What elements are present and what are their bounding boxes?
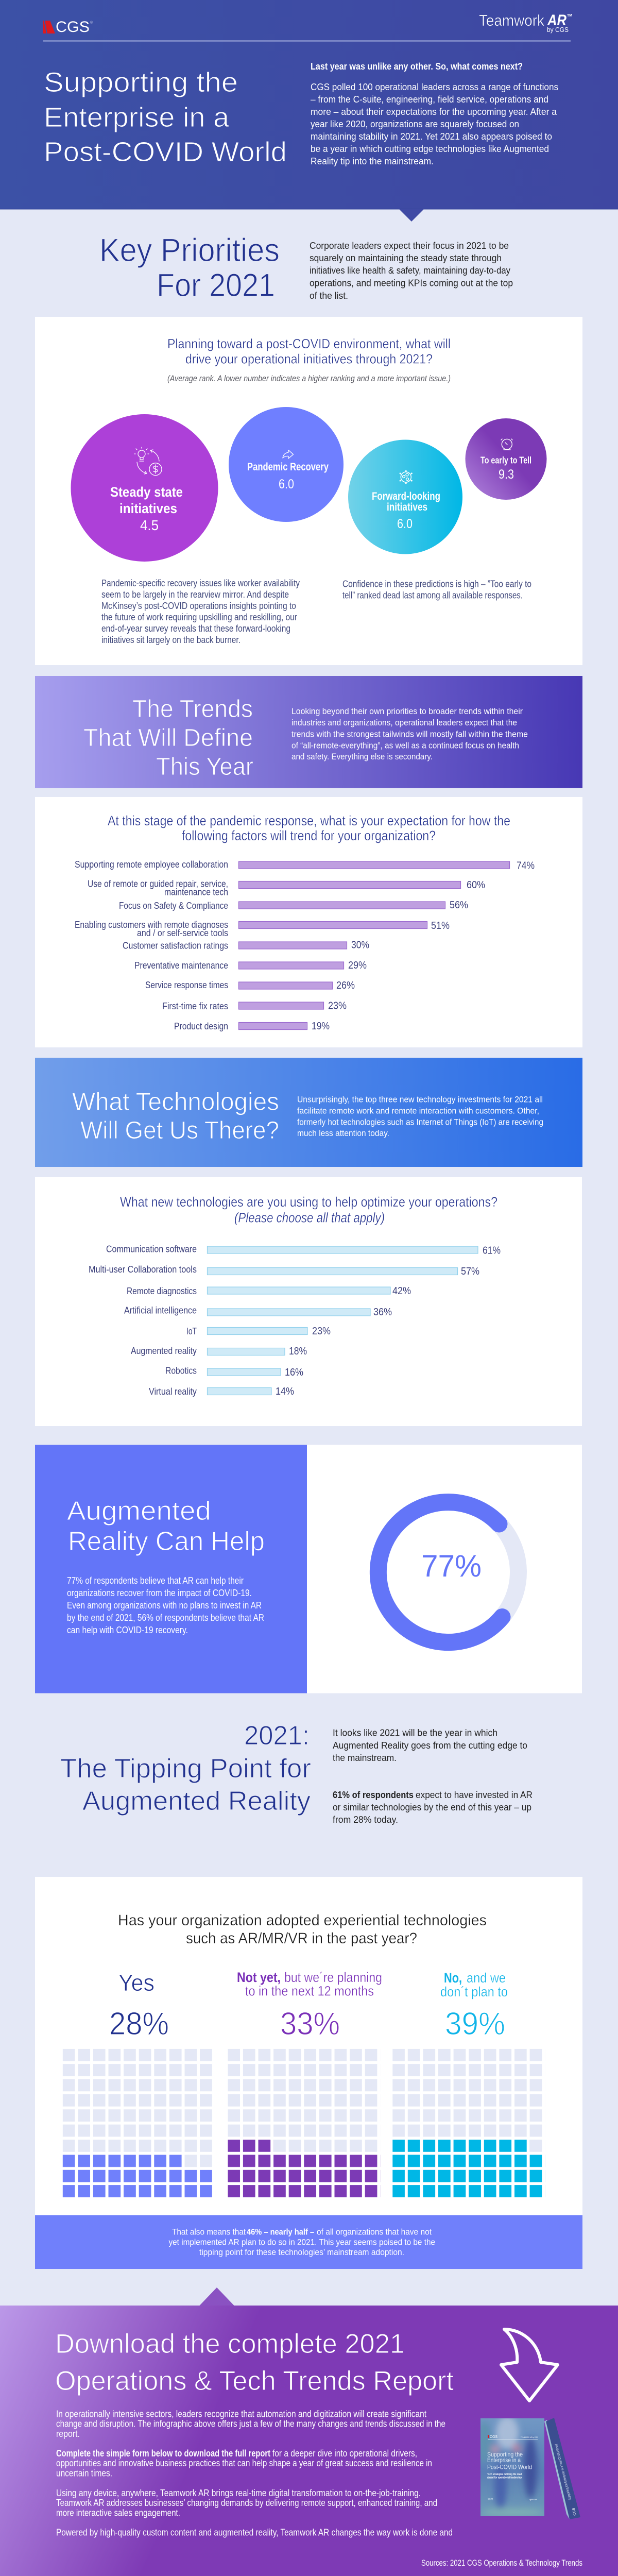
text block: uncertain times. [56, 2468, 112, 2478]
bubble: pandemic recovery [229, 407, 344, 522]
text block: for a deeper dive into operational drivers, [272, 2448, 417, 2459]
key priorities intro: squarely on maintaining the steady state through [310, 253, 502, 263]
bar chart: 42% [392, 1285, 411, 1297]
intro text: Last year was unlike any other. So, what comes next? [311, 61, 523, 72]
intro text: year like 2020, organizations are squarely focused on [311, 119, 519, 129]
panel: priorities bubbles [35, 317, 582, 665]
bar chart: 26% [336, 980, 355, 991]
bar chart: First-time fix rates [162, 1001, 228, 1011]
bar chart: 14% [276, 1386, 294, 1397]
bubble: forward-looking: Forward-looking [372, 490, 440, 502]
report book mockup: 2021 [488, 2498, 493, 2501]
paragraph: pandemic-specific: McKinsey’s post-COVID operations insights pointing to [101, 601, 296, 611]
bar chart: Service response times [145, 980, 228, 990]
logo: Teamwork AR by CGS: by CGS [547, 26, 569, 33]
panel: augmented reality can help [35, 1445, 582, 1693]
question: such as AR/MR/VR in the past year? [186, 1930, 417, 1947]
text block: more interactive sales engagement. [56, 2508, 180, 2518]
column: not yet: but we´re planning [284, 1970, 382, 1985]
intro text: more – about their expectations for the upcoming year. After a [311, 107, 557, 117]
heading: This Year [156, 753, 253, 781]
text block: Complete the simple form below to download the full report [56, 2448, 270, 2459]
paragraph: confidence [342, 579, 531, 601]
intro text: be a year in which cutting edge technologies like Augmented [311, 144, 549, 154]
column: no: 39% [445, 2006, 505, 2042]
bar chart: Artificial intelligence [124, 1306, 197, 1316]
heading: Operations & Tech Trends Report [55, 2366, 454, 2396]
heading: tipping point: 2021: [244, 1721, 310, 1751]
text block: can help with COVID-19 recovery. [67, 1625, 188, 1635]
banner: the trends [35, 676, 582, 788]
bubble: pandemic recovery: 6.0 [279, 477, 294, 492]
question [118, 1912, 487, 1947]
bar chart: Customer satisfaction ratings [123, 941, 228, 951]
logo: Teamwork AR by CGS: AR [547, 12, 566, 29]
icon: curved down arrow [501, 2329, 558, 2401]
report book mockup: Supporting the Enterprise in a Post-COVID World [555, 2444, 572, 2500]
donut chart 77%: 77% [421, 1549, 482, 1583]
text block: formerly hot technologies such as Internet of Things (IoT) are receiving [297, 1117, 543, 1127]
text block [67, 1575, 264, 1635]
text block: Teamwork AR addresses businesses’ changing demands by delivering remote support, enhanced training, and [56, 2498, 437, 2508]
heading [55, 2329, 454, 2396]
bubble: too early to tell [466, 418, 547, 500]
report book mockup: ahead for operational leadership [487, 2476, 522, 2479]
bar chart: 30% [351, 940, 369, 951]
bar chart [75, 859, 535, 1032]
heading: tipping point [60, 1721, 311, 1816]
column: no: No, [444, 1970, 462, 1986]
panel: download footer [0, 2287, 618, 2576]
icon: virus [400, 470, 412, 484]
column: no [392, 1970, 545, 2200]
paragraph: pandemic-specific [101, 578, 300, 645]
heading: Download the complete 2021 [55, 2329, 405, 2359]
bubble: steady state: initiatives [119, 501, 177, 516]
report book mockup: Tech strategies defining the road [487, 2473, 522, 2476]
column: yes: Yes [118, 1970, 154, 1996]
tipping point text: Augmented Reality goes from the cutting edge to [333, 1740, 527, 1751]
paragraph: pandemic-specific: the future of work requiring upskilling and reskilling, our [101, 612, 297, 622]
bar chart: 61% [483, 1245, 501, 1256]
bar chart: Communication software [106, 1244, 197, 1254]
tipping point text: expect to have invested in AR [416, 1790, 533, 1800]
bar chart: 19% [312, 1021, 330, 1032]
waffle: 39 of 100 [392, 2049, 545, 2200]
paragraph: pandemic-specific: Pandemic-specific recovery issues like worker availability [101, 578, 300, 588]
paragraph: pandemic-specific: seem to be largely in the rearview mirror. And despite [101, 589, 289, 600]
report book mockup: TEAMWORK AR by CGS [521, 2436, 538, 2438]
text block: of “all-remote-everything”, as well as a continued focus on health [291, 741, 519, 750]
question: Planning toward a post-COVID environment, what will [167, 336, 451, 351]
column: no: don´t plan to [440, 1984, 508, 1999]
column: not yet: to in the next 12 months [245, 1984, 374, 1999]
text block: much less attention today. [297, 1128, 389, 1138]
tipping point text: 61% of respondents [333, 1790, 414, 1800]
question: What new technologies are you using to help optimize your operations? [120, 1194, 497, 1210]
bar chart: Enabling customers with remote diagnoses [75, 920, 228, 930]
intro text: CGS polled 100 operational leaders across a range of functions [311, 82, 558, 92]
waffle: 28 of 100 [63, 2049, 215, 2200]
text block: 77% of respondents believe that AR can help their [67, 1575, 244, 1586]
heading: What Technologies [72, 1088, 279, 1116]
text block [56, 2409, 453, 2538]
bar chart: Robotics [165, 1365, 197, 1376]
main title: Enterprise in a [44, 102, 230, 133]
bar chart: 18% [289, 1346, 307, 1357]
icon: arrow [283, 450, 294, 459]
text block [297, 1094, 543, 1138]
bubble: steady state [71, 414, 218, 562]
text block: and safety. Everything else is secondary. [291, 752, 433, 761]
bubble: too early to tell: 9.3 [499, 467, 514, 482]
report book mockup: Post-COVID World [487, 2464, 532, 2471]
tipping point text: It looks like 2021 will be the year in which [333, 1728, 497, 1738]
main title: Supporting the [44, 67, 238, 98]
paragraph: pandemic-specific: end-of-year survey reveals that these forward-looking [101, 623, 290, 634]
key priorities intro: of the list. [310, 291, 348, 301]
heading [72, 1088, 279, 1144]
bar chart: 56% [450, 900, 468, 911]
heading: tipping point: Augmented Reality [82, 1786, 311, 1816]
bar chart: Virtual reality [149, 1386, 197, 1397]
bar chart: maintenance tech [164, 887, 228, 897]
heading: tipping point: The Tipping Point for [60, 1754, 311, 1784]
bar chart: Multi-user Collaboration tools [89, 1264, 197, 1275]
text block: Unsurprisingly, the top three new technology investments for 2021 all [297, 1094, 543, 1105]
text block: In operationally intensive sectors, leaders recognize that automation and digitization will create significant [56, 2409, 426, 2419]
tipping point text: or similar technologies by the end of this year – up [333, 1802, 531, 1812]
paragraph: confidence: Confidence in these predictions is high – ”Too early to [342, 579, 531, 589]
text block [291, 706, 528, 761]
bar chart: 57% [461, 1266, 479, 1277]
icon: bulb and dollar cycle [134, 447, 162, 476]
callout: 46 percent: of all organizations that have not [317, 2227, 432, 2237]
text block: opportunities and innovative business practices that can help shape a year of great success and resilience in [56, 2458, 432, 2468]
logo: CGS [43, 19, 93, 36]
key priorities intro [310, 241, 513, 301]
bubble: too early to tell: To early to Tell [480, 455, 531, 466]
bubble: forward-looking: 6.0 [397, 517, 413, 531]
logo: Teamwork AR by CGS [479, 11, 572, 33]
question [108, 813, 510, 843]
report book mockup: Supporting the [487, 2451, 523, 2458]
question: following factors will trend for your organization? [182, 828, 436, 843]
icon: clock [501, 439, 512, 450]
heading: Key Priorities: Key Priorities [99, 232, 280, 268]
bar chart: 29% [348, 960, 367, 971]
main title: Post-COVID World [44, 137, 287, 167]
heading: Reality Can Help [68, 1527, 265, 1556]
tipping point text: the mainstream. [333, 1753, 397, 1763]
report book mockup: CGS [572, 2507, 577, 2516]
column: yes [63, 1970, 215, 2200]
text block: facilitate remote work and remote interaction with customers. Other, [297, 1106, 539, 1116]
bar chart: 51% [431, 920, 450, 931]
text block: Even among organizations with no plans to invest in AR [67, 1600, 262, 1611]
logo: Teamwork AR by CGS: Teamwork [479, 11, 544, 29]
text block: report. [56, 2429, 80, 2439]
text block: change and disruption. The infographic above offers just a few of the many changes and trends discussed in the [56, 2418, 445, 2429]
bubble: pandemic recovery: Pandemic Recovery [247, 461, 329, 473]
heading [83, 696, 253, 781]
key priorities intro: operations, and meeting KPIs coming out at the top [310, 278, 513, 289]
bar chart: 23% [328, 1001, 347, 1012]
bar chart: Product design [174, 1021, 228, 1031]
intro text [311, 61, 558, 166]
bar chart: Focus on Safety & Compliance [119, 901, 228, 911]
question [167, 336, 451, 367]
heading [67, 1496, 265, 1556]
question: drive your operational initiatives through 2021? [185, 351, 433, 367]
bar chart: 23% [312, 1326, 331, 1337]
key priorities intro: Corporate leaders expect their focus in 2021 to be [310, 241, 509, 251]
bar chart: 74% [517, 860, 535, 872]
paragraph: confidence: tell” ranked dead last among all available responses. [342, 590, 523, 601]
report book mockup: Enterprise in a [487, 2456, 521, 2464]
callout: 46 percent [35, 2215, 582, 2269]
intro text: maintaining stability in 2021. Yet 2021 also appears poised to [311, 131, 552, 142]
column: not yet [228, 1970, 382, 2200]
text block: by the end of 2021, 56% of respondents believe that AR [67, 1613, 264, 1623]
question: (Please choose all that apply) [234, 1210, 385, 1225]
text block: industries and organizations, operational leaders expect that the [291, 718, 517, 727]
bar chart: Preventative maintenance [134, 960, 228, 971]
callout: 46 percent: yet implemented AR plan to do so in 2021. This year seems poised to be the [169, 2237, 435, 2247]
bar chart: Augmented reality [131, 1346, 197, 1356]
waffle: 33 of 100 [228, 2049, 380, 2200]
intro text: – from the C-suite, engineering, field service, operations and [311, 94, 548, 105]
question [120, 1194, 497, 1225]
logo: CGS: CGS [56, 19, 90, 36]
bar chart [89, 1244, 501, 1397]
bubble: forward-looking [348, 440, 462, 554]
bar chart: and / or self-service tools [137, 928, 228, 938]
donut chart 77% [378, 1502, 518, 1642]
column: no: and we [467, 1970, 506, 1986]
bar chart: Supporting remote employee collaboration [75, 859, 228, 870]
text block: trends with the strongest tailwinds will mostly fall within the theme [291, 730, 528, 739]
heading: Will Get Us There? [80, 1117, 279, 1144]
column: not yet: 33% [280, 2006, 340, 2042]
report book mockup [477, 2416, 580, 2519]
heading: The Trends [132, 696, 253, 723]
heading: Key Priorities: For 2021 [157, 267, 275, 303]
banner: what technologies [35, 1058, 582, 1167]
bar chart: 36% [373, 1307, 392, 1318]
heading: That Will Define [83, 724, 253, 752]
question: At this stage of the pandemic response, what is your expectation for how the [108, 813, 510, 828]
bar chart: 60% [467, 879, 485, 891]
tipping point text: from 28% today. [333, 1815, 398, 1825]
panel: trends bar chart [35, 797, 582, 1047]
callout: 46 percent: That also means that [172, 2227, 246, 2237]
text block: Powered by high-quality custom content and augmented reality, Teamwork AR changes the way work is done and [56, 2528, 453, 2538]
heading: Augmented [67, 1496, 211, 1526]
callout: 46 percent: 46% – nearly half – [247, 2227, 314, 2237]
main title [44, 67, 287, 167]
bubble: steady state: Steady state [110, 484, 183, 500]
logo: Teamwork AR by CGS: TM [567, 14, 572, 18]
logo: CGS: ® [90, 21, 93, 25]
panel: technologies bar chart [35, 1177, 582, 1426]
header band [0, 0, 618, 222]
note: (Average rank. A lower number indicates a higher ranking and a more important issue.) [167, 374, 451, 383]
text block: Using any device, anywhere, Teamwork AR brings real-time digital transformation to on-the-job-training. [56, 2488, 421, 2498]
heading: Key Priorities [99, 232, 280, 303]
report book mockup: cgsinc.com [529, 2499, 537, 2501]
key priorities intro: initiatives like health & safety, maintaining day-to-day [310, 265, 510, 276]
callout: 46 percent: tipping point for these technologies’ mainstream adoption. [199, 2247, 404, 2257]
bubble: steady state: 4.5 [140, 517, 159, 533]
column: not yet: Not yet, [237, 1970, 281, 1985]
report book mockup: CGS [490, 2435, 497, 2439]
bubble: forward-looking: initiatives [387, 501, 427, 513]
bar chart: Use of remote or guided repair, service, [88, 879, 228, 889]
text block: organizations recover from the impact of COVID-19. [67, 1588, 252, 1598]
intro text: Reality tip into the mainstream. [311, 156, 434, 166]
column: yes: 28% [109, 2006, 169, 2042]
text block: Looking beyond their own priorities to broader trends within their [291, 706, 523, 716]
bar chart: Remote diagnostics [127, 1286, 197, 1296]
bar chart: 16% [285, 1367, 303, 1378]
panel: adoption waffle charts [35, 1877, 582, 2215]
paragraph: pandemic-specific: initiatives sit largely on the back burner. [101, 635, 241, 645]
bar chart: IoT [186, 1326, 197, 1336]
tipping point text [333, 1728, 533, 1825]
question: Has your organization adopted experiential technologies [118, 1912, 487, 1929]
